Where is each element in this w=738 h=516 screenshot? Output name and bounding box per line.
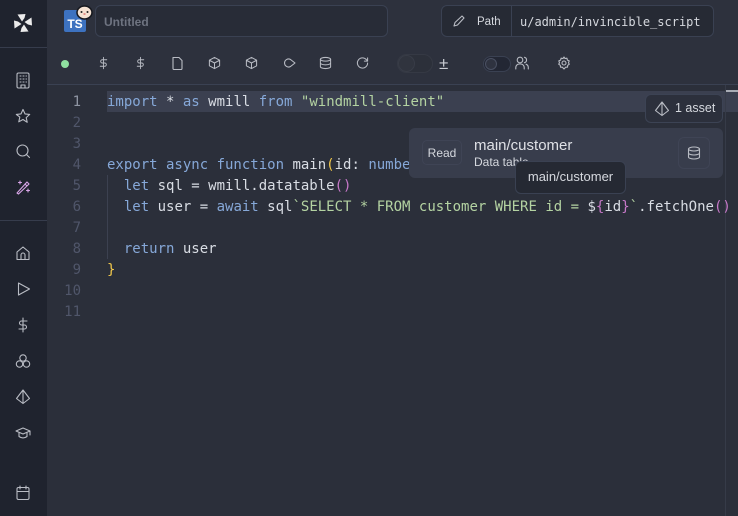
icon: TypeScript badge	[64, 10, 86, 32]
icon: refresh	[356, 57, 368, 69]
path value: u/admin/invincible_script	[520, 15, 701, 29]
tooltip: main/customer	[528, 169, 613, 184]
icon: calendar	[16, 486, 30, 500]
icon: asset diamond	[655, 101, 669, 116]
icon: graduation cap	[16, 428, 31, 438]
path field	[441, 5, 714, 37]
code block: let user = await sql`SELECT * FROM customer WHERE id = ${id}`.fetchOne()	[124, 199, 731, 215]
line numbers: 6	[73, 199, 81, 215]
code block: export async function main(id: number	[107, 157, 419, 173]
asset badge	[645, 94, 723, 123]
line numbers: 10	[64, 283, 81, 299]
code block: }	[107, 262, 115, 278]
tooltip	[515, 161, 626, 194]
read badge: Read	[428, 146, 456, 160]
diff symbol: ±	[439, 54, 448, 73]
icon: database	[688, 146, 700, 160]
icon: magic wand	[16, 180, 30, 195]
icon: database	[320, 56, 332, 70]
toolbar	[61, 54, 570, 73]
icon: box	[246, 56, 258, 70]
icon: dollar	[100, 56, 108, 70]
toggle knob	[398, 55, 415, 72]
sidebar divider top	[0, 47, 47, 48]
sidebar	[0, 0, 47, 516]
icon: pencil	[454, 16, 464, 26]
editor scrollbar line	[725, 85, 726, 516]
line numbers: 5	[73, 178, 81, 194]
database button	[678, 137, 710, 169]
read badge	[422, 140, 462, 165]
icon: dollar	[136, 56, 144, 70]
header bar	[47, 0, 738, 85]
line numbers: 7	[73, 220, 81, 236]
icon: home	[16, 246, 30, 260]
icon: search	[16, 144, 30, 158]
line numbers: 8	[73, 241, 81, 257]
asset popover	[409, 128, 723, 178]
line numbers: 11	[64, 304, 81, 320]
sidebar divider middle	[0, 220, 47, 221]
line numbers: 2	[73, 115, 81, 131]
code block	[107, 94, 731, 278]
editor current line highlight	[107, 91, 738, 112]
code block: return user	[124, 241, 217, 257]
toggle: diff	[397, 54, 433, 73]
line numbers: 9	[73, 262, 81, 278]
line numbers: 4	[73, 157, 81, 173]
icon: file	[172, 57, 183, 70]
icon: play	[18, 282, 30, 296]
icon: box	[208, 56, 220, 70]
icon: dollar	[18, 318, 28, 332]
icon: windmill logo	[14, 14, 32, 32]
status dot	[61, 60, 69, 68]
toggle knob	[485, 58, 497, 70]
asset count: 1 asset	[675, 101, 715, 115]
icon: asset diamond	[16, 389, 30, 404]
asset name: main/customer	[474, 137, 572, 154]
icon: cubes	[16, 354, 30, 368]
icon: users	[515, 56, 529, 70]
icon: star	[16, 108, 30, 123]
icon: bun mascot	[76, 5, 93, 20]
icon: settings gear	[558, 56, 570, 70]
icon: bun	[284, 58, 296, 68]
code block: import * as wmill from "windmill-client"	[107, 94, 444, 110]
code block: let sql = wmill.datatable()	[124, 178, 351, 194]
line numbers: 3	[73, 136, 81, 152]
indent guide	[107, 175, 108, 259]
path divider	[511, 6, 512, 36]
line numbers: 1	[73, 94, 81, 110]
asset type: Data table	[474, 155, 529, 169]
title input	[95, 5, 388, 37]
title input: Untitled	[104, 15, 149, 29]
icon: TypeScript badge: TS	[67, 17, 83, 31]
line numbers	[64, 94, 81, 320]
toggle: collaboration	[483, 56, 511, 72]
editor scrollbar marker	[726, 90, 738, 92]
path label: Path	[477, 16, 501, 28]
icon: building	[16, 72, 30, 88]
